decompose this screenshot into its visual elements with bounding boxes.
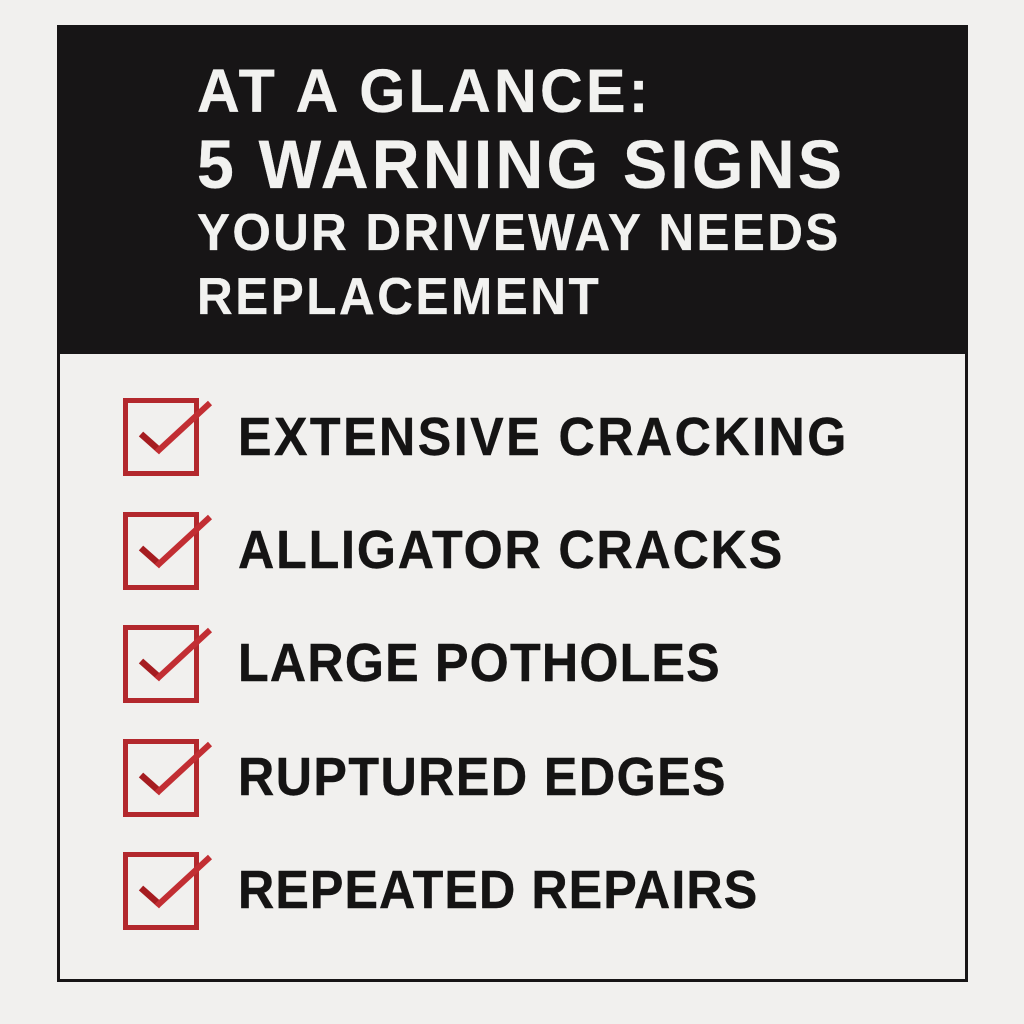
- icon: checkbox 5: [123, 852, 212, 930]
- heading: replacement: REPLACEMENT: [197, 268, 601, 326]
- heading: at a glance: AT A GLANCE:: [197, 57, 652, 125]
- heading: your driveway needs: YOUR DRIVEWAY NEEDS: [197, 204, 841, 262]
- icon: checkbox 1: [123, 398, 212, 476]
- text: large potholes: LARGE POTHOLES: [238, 633, 721, 693]
- icon: checkbox 2: [123, 512, 212, 590]
- icon: checkbox 4: [123, 739, 212, 817]
- icon: checkbox 3: [123, 625, 212, 703]
- text: extensive cracking: EXTENSIVE CRACKING: [238, 407, 849, 467]
- heading: 5 warning signs: 5 WARNING SIGNS: [197, 126, 845, 203]
- panel: header banner: [57, 25, 968, 354]
- text: repeated repairs: REPEATED REPAIRS: [238, 860, 758, 920]
- text: ruptured edges: RUPTURED EDGES: [238, 747, 727, 807]
- text: alligator cracks: ALLIGATOR CRACKS: [238, 520, 784, 580]
